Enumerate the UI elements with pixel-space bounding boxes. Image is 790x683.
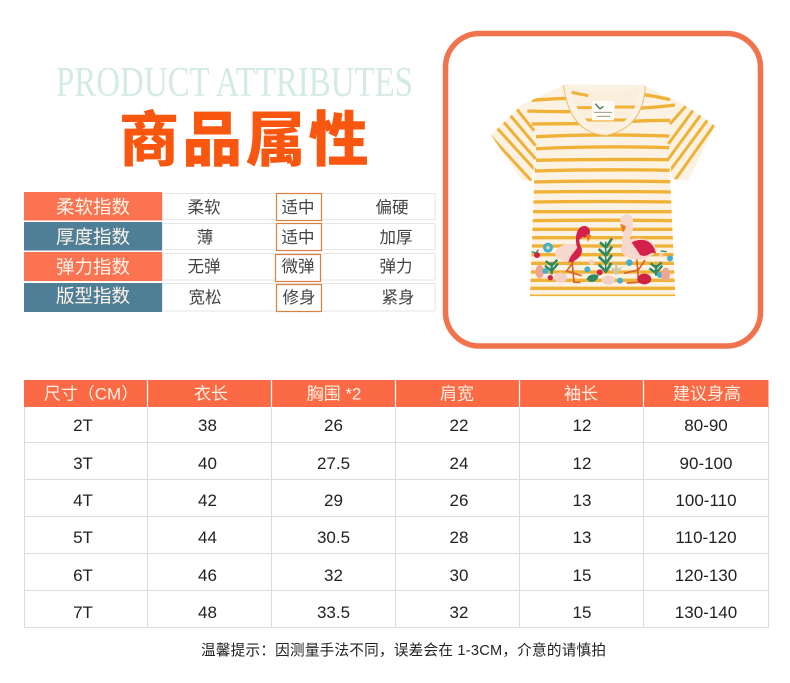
row: 2T: 80-90	[684, 416, 728, 435]
row: 6T: 46	[198, 566, 217, 585]
row: 5T: 110-120	[675, 528, 737, 547]
embroidered flowers	[532, 243, 673, 285]
row: 5T: 30.5	[317, 528, 350, 547]
row: softness: 适中	[282, 198, 314, 217]
row: 3T: 27.5	[317, 454, 350, 473]
row: 6T	[73, 566, 737, 585]
row: 3T: 40	[198, 454, 217, 473]
row: 2T: 2T	[73, 416, 93, 435]
row: 6T: 15	[573, 566, 591, 585]
shirt silhouette	[491, 84, 715, 296]
row: 7T: 15	[573, 603, 591, 622]
row: elasticity: 弹力	[380, 257, 412, 276]
collar and inner back	[563, 84, 645, 135]
row: 6T: 120-130	[675, 566, 737, 585]
row: fit: 修身	[282, 288, 316, 307]
row: 4T: 100-110	[675, 491, 737, 510]
row: 3T: 24	[450, 454, 468, 473]
row: 5T: 5T	[73, 528, 93, 547]
row: 4T: 4T	[73, 491, 93, 510]
row: thickness	[24, 222, 435, 250]
row: 7T: 33.5	[317, 603, 350, 622]
right flamingo	[620, 214, 656, 283]
body stripes	[527, 94, 676, 288]
row: fit: 紧身	[382, 288, 414, 307]
row: 4T	[73, 491, 737, 510]
row: thickness: 适中	[282, 228, 314, 247]
sleeve stripes	[490, 106, 714, 181]
row: fit	[24, 283, 435, 312]
row: 7T: 130-140	[675, 603, 737, 622]
row: 5T: 13	[573, 528, 591, 547]
attribute table	[24, 192, 435, 312]
row: fit: 宽松	[188, 288, 222, 307]
row: softness	[24, 192, 435, 220]
footnote: 温馨提示：因测量手法不同，误差会在 1-3CM，介意的请慎拍	[201, 641, 606, 659]
row: 6T: 6T	[73, 566, 93, 585]
row: fit: 版型指数	[56, 286, 130, 306]
header row: 肩宽	[440, 384, 474, 404]
row: 2T: 22	[450, 416, 468, 435]
row: 4T: 29	[324, 491, 343, 510]
row: 7T: 48	[198, 603, 217, 622]
row: 3T: 90-100	[680, 454, 732, 473]
row: thickness: 薄	[197, 228, 213, 247]
header row: 袖长	[564, 384, 598, 404]
row: elasticity: 微弹	[282, 257, 314, 276]
left flamingo	[554, 226, 591, 282]
row: elasticity: 弹力指数	[56, 256, 130, 278]
row: 6T: 32	[324, 566, 343, 585]
title: 商品属性	[119, 92, 372, 179]
header row: 尺寸（CM）	[44, 384, 138, 404]
row: 3T	[73, 454, 732, 473]
row: 2T: 26	[324, 416, 343, 435]
english heading: PRODUCT ATTRIBUTES	[56, 60, 413, 106]
product image frame	[446, 34, 760, 346]
row: elasticity: 无弹	[188, 257, 220, 276]
row: 7T: 7T	[73, 603, 93, 622]
row: 2T: 12	[573, 416, 591, 435]
central leaves	[545, 238, 662, 282]
row: 5T: 44	[198, 528, 217, 547]
row: 4T: 13	[573, 491, 591, 510]
header row: 衣长	[194, 384, 228, 404]
row: thickness: 厚度指数	[56, 226, 130, 248]
row: thickness: 加厚	[380, 228, 412, 247]
row: softness: 偏硬	[376, 198, 408, 217]
row: softness: 柔软	[188, 198, 220, 217]
row: 6T: 30	[450, 566, 468, 585]
header row: 胸围 *2	[307, 384, 361, 404]
row: 2T: 38	[198, 416, 217, 435]
header row: 建议身高	[673, 384, 741, 404]
row: 3T: 12	[573, 454, 591, 473]
row: 7T: 32	[450, 603, 468, 622]
row: 3T: 3T	[73, 454, 93, 473]
size table	[24, 380, 769, 628]
row: 2T	[73, 416, 728, 435]
row: 5T: 28	[450, 528, 468, 547]
row: 7T	[73, 603, 737, 622]
header row	[24, 380, 768, 407]
row: 4T: 42	[198, 491, 217, 510]
row: softness: 柔软指数	[56, 196, 130, 218]
table grid	[24, 407, 769, 628]
row: 4T: 26	[450, 491, 468, 510]
t-shirt illustration	[490, 84, 715, 296]
row: elasticity	[24, 252, 435, 282]
row: 5T	[73, 528, 737, 547]
